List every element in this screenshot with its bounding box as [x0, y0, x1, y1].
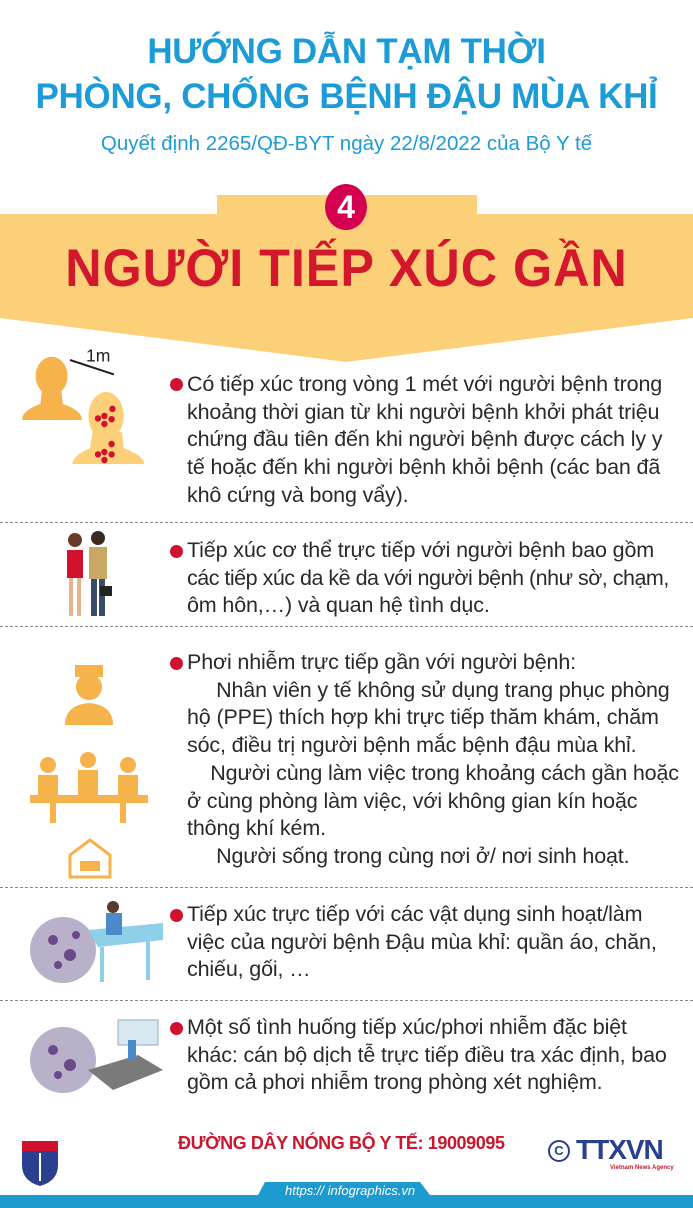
logo: TTXVN: TTXVN	[576, 1134, 663, 1165]
text 3	[187, 650, 679, 868]
icon: 1m distance	[22, 346, 144, 464]
footer bar with url: https:// infographics.vn	[285, 1183, 415, 1198]
text 1: khoảng thời gian từ khi người bệnh khởi phát triệu	[187, 400, 659, 424]
logo: ministry of health	[22, 1141, 58, 1186]
text 1: Có tiếp xúc trong vòng 1 mét với người bệnh trong	[187, 372, 662, 396]
text 3: hộ (PPE) thích hợp khi trực tiếp thăm khám, chăm	[187, 705, 659, 729]
text 3: Phơi nhiễm trực tiếp gần với người bệnh:	[187, 650, 576, 674]
logo: TTXVN: C	[554, 1143, 564, 1158]
logo: TTXVN	[548, 1134, 674, 1171]
logo: TTXVN: Vietnam News Agency	[610, 1165, 674, 1171]
text 2	[187, 538, 669, 617]
text 2: ôm hôn,…) và quan hệ tình dục.	[187, 593, 490, 617]
text 3: ở cùng phòng làm việc, với không gian kín hoặc	[187, 789, 637, 813]
text 3: Người sống trong cùng nơi ở/ nơi sinh hoạt.	[216, 844, 629, 868]
text 3: sóc, điều trị người bệnh mắc bệnh đậu mùa khỉ.	[187, 733, 636, 757]
text 5: Một số tình huống tiếp xúc/phơi nhiễm đặc biệt	[187, 1015, 627, 1039]
text 5: gồm cả phơi nhiễm trong phòng xét nghiệm.	[187, 1070, 603, 1094]
title	[36, 32, 658, 116]
bullet 1	[170, 378, 183, 391]
icon: virus & worker	[30, 901, 163, 983]
title: HƯỚNG DẪN TẠM THỜI	[147, 32, 546, 71]
text 5: khác: cán bộ dịch tễ trực tiếp điều tra xác định, bao	[187, 1043, 667, 1067]
text 5	[187, 1015, 667, 1094]
text 1: khô cứng và bong vẩy).	[187, 483, 408, 507]
section heading: NGƯỜI TIẾP XÚC GẦN	[65, 239, 628, 298]
icon: couple	[67, 531, 112, 616]
text 1	[187, 372, 662, 507]
bullet 4	[170, 909, 183, 922]
text 1: tế hoặc đến khi người bệnh khỏi bệnh (các ban đã	[187, 455, 660, 479]
text 4: Tiếp xúc trực tiếp với các vật dụng sinh hoạt/làm	[187, 902, 642, 926]
text 4	[187, 902, 657, 981]
text 4: chiếu, gối, …	[187, 957, 311, 981]
number badge: 4	[337, 189, 355, 225]
title: PHÒNG, CHỐNG BỆNH ĐẬU MÙA KHỈ	[36, 77, 657, 116]
number badge	[325, 184, 367, 230]
text 3: Người cùng làm việc trong khoảng cách gần hoặc	[210, 761, 679, 785]
bullet 3	[170, 657, 183, 670]
text 2: các tiếp xúc da kề da với người bệnh (như sờ, chạm,	[187, 566, 669, 590]
bullet 5	[170, 1022, 183, 1035]
subtitle: Quyết định 2265/QĐ-BYT ngày 22/8/2022 của Bộ Y tế	[101, 132, 592, 155]
icon: 1m distance: 1m	[86, 346, 110, 366]
hotline: ĐƯỜNG DÂY NÓNG BỘ Y TẾ: 19009095	[178, 1133, 505, 1153]
text 3: thông khí kém.	[187, 816, 326, 840]
icon: nurse, meeting, house	[30, 665, 148, 878]
text 3: Nhân viên y tế không sử dụng trang phục phòng	[216, 678, 670, 702]
bullet 2	[170, 545, 183, 558]
text 2: Tiếp xúc cơ thể trực tiếp với người bệnh bao gồm	[187, 538, 654, 562]
icon: lab	[30, 1020, 163, 1093]
banner	[0, 195, 693, 362]
text 1: chứng đầu tiên đến khi người bệnh được cách ly y	[187, 427, 662, 451]
footer bar with url	[0, 1182, 693, 1208]
text 4: việc của người bệnh Đậu mùa khỉ: quần áo, chăn,	[187, 930, 657, 954]
